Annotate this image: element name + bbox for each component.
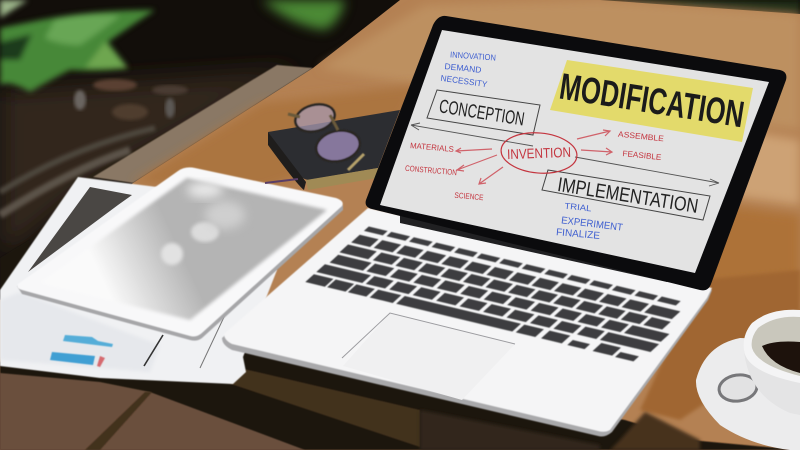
tablet xyxy=(17,167,343,341)
long arrows xyxy=(411,123,719,186)
laptop screen bezel xyxy=(366,16,786,290)
notebook xyxy=(265,110,400,190)
laptop hinge xyxy=(400,214,668,282)
invention ellipse: INVENTION xyxy=(507,144,571,162)
background beam xyxy=(93,65,313,183)
cup body xyxy=(744,330,800,415)
laptop base xyxy=(222,208,712,436)
laptop xyxy=(222,16,786,437)
laptop screen xyxy=(380,30,769,273)
blue labels: NECESSITY xyxy=(440,73,488,89)
red labels: ASSEMBLE xyxy=(618,130,664,143)
cup interior xyxy=(752,317,800,376)
blue labels: TRIAL xyxy=(564,201,592,213)
paper: dark photo triangle xyxy=(28,187,132,272)
coffee xyxy=(762,342,800,373)
invention ellipse xyxy=(499,130,579,176)
blue labels: DEMAND xyxy=(444,61,482,75)
red arrows xyxy=(456,130,612,184)
glasses xyxy=(288,100,364,170)
blue labels xyxy=(440,49,623,242)
red labels: MATERIALS xyxy=(410,141,454,154)
saucer xyxy=(696,338,800,450)
conception box: CONCEPTION xyxy=(438,96,526,131)
implementation box: IMPLEMENTATION xyxy=(556,174,700,218)
plant leaves xyxy=(0,0,800,92)
blue labels: EXPERIMENT xyxy=(560,215,623,234)
red labels: SCIENCE xyxy=(454,191,484,202)
cup handle xyxy=(717,372,759,404)
red labels: FEASIBLE xyxy=(622,149,662,162)
paper: blue bar chart xyxy=(50,335,113,367)
red labels xyxy=(405,130,664,202)
conception box xyxy=(427,90,540,135)
tablet screen xyxy=(40,178,327,320)
paper: lined text area xyxy=(0,292,160,372)
yellow banner with heading xyxy=(550,60,753,142)
keyboard xyxy=(305,226,701,363)
red labels: CONSTRUCTION xyxy=(405,164,457,177)
coffee cup and saucer xyxy=(696,310,800,450)
dark table edge and floor planks xyxy=(0,240,800,450)
blue labels: INNOVATION xyxy=(450,49,496,63)
papers with charts xyxy=(0,177,277,384)
cup rim xyxy=(744,310,800,383)
blue labels: FINALIZE xyxy=(556,227,601,242)
trackpad xyxy=(342,313,515,400)
